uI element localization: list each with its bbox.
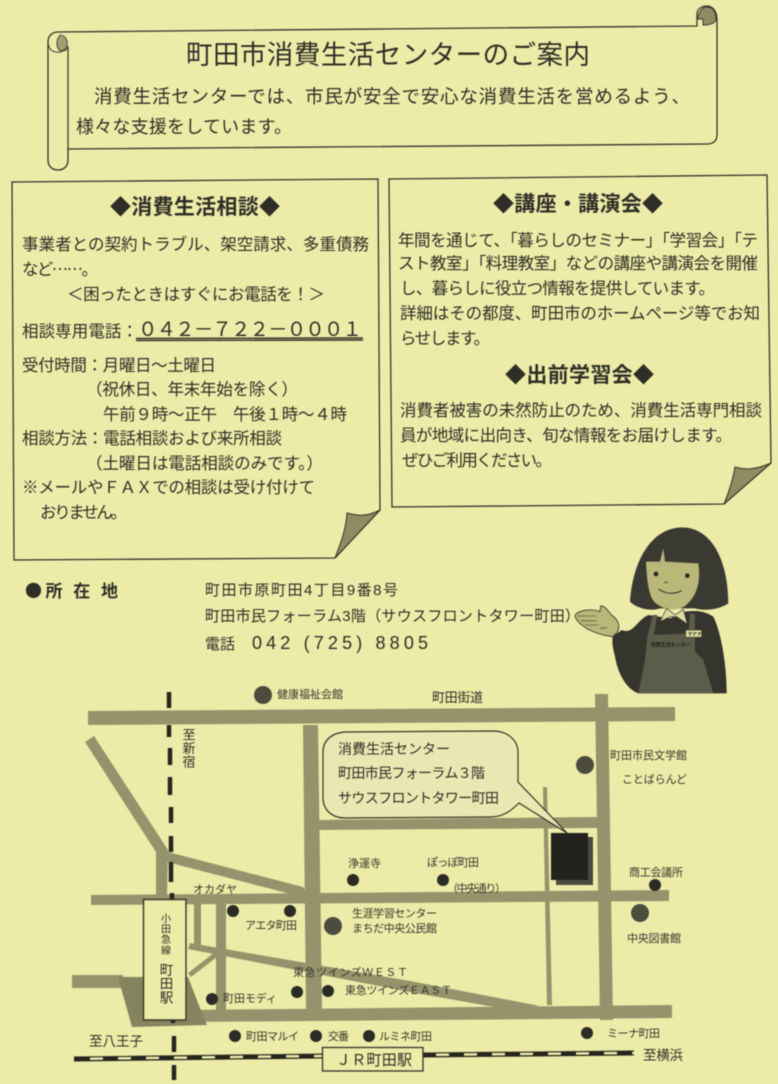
landmark labels: ルミネ町田 xyxy=(379,1030,432,1043)
direction: Hachioji: 至八王子 xyxy=(89,1034,143,1049)
hours and methods: 相談方法：電話相談および来所相談 xyxy=(22,429,282,448)
address block xyxy=(205,582,580,653)
landmark labels: （中央通り） xyxy=(447,882,506,895)
intro text xyxy=(76,86,690,137)
phone number: ０４２－７２２－０００１ xyxy=(138,319,362,341)
consultation body text: など……。 xyxy=(22,256,98,280)
landmark labels: ぽっぽ町田 xyxy=(427,856,479,869)
hours and methods: おりません。 xyxy=(40,503,127,522)
direction: Yokohama: 至横浜 xyxy=(643,1048,684,1063)
heading: ◆講座・講演会◆ xyxy=(493,193,663,216)
outreach body text: 消費者被害の未然防止のため、消費生活専門相談 xyxy=(400,401,762,420)
callout: consumer center: 町田市民フォーラム３階 xyxy=(338,765,485,781)
page curl xyxy=(335,510,380,558)
JR Machida station: ＪＲ町田駅 xyxy=(336,1052,412,1069)
Odakyu Machida station xyxy=(144,900,186,1020)
illustration: staff woman gesturing: マナナ xyxy=(688,632,702,638)
callout: consumer center xyxy=(323,731,567,833)
Odakyu Machida station: 町田駅 xyxy=(158,963,173,1004)
consultation body text: 事業者との契約トラブル、架空請求、多重債務 xyxy=(22,234,370,254)
hours and methods: 受付時間：月曜日～土曜日 xyxy=(22,356,216,375)
illustration: staff woman gesturing xyxy=(575,527,728,693)
direction: Shinjuku: 至新宿 xyxy=(180,728,196,768)
hours and methods xyxy=(22,356,347,522)
consultation body text xyxy=(22,234,370,304)
lectures body text: し、暮らしに役立つ情報を提供しています。 xyxy=(400,279,715,298)
location heading: ●所 在 地 xyxy=(25,577,118,602)
landmark labels xyxy=(193,687,687,1043)
landmark labels: 生涯学習センター xyxy=(352,906,437,920)
landmark labels: 東急ツインズＥＡＳＴ xyxy=(345,983,452,997)
landmark labels: 交番 xyxy=(328,1030,349,1043)
hours and methods: ※メールやＦＡＸでの相談は受け付けて xyxy=(22,478,315,497)
address block: 町田市原町田4丁目9番8号 xyxy=(205,582,398,599)
Odakyu line xyxy=(169,692,174,1080)
phone number xyxy=(22,319,363,341)
landmark labels: 町田市民文学館 xyxy=(610,748,687,762)
landmark labels: 中央図書館 xyxy=(627,931,681,945)
landmark labels: 健康福祉会館 xyxy=(277,687,343,701)
panel: lectures and outreach xyxy=(389,175,771,507)
page curl xyxy=(724,463,771,504)
lectures body text: らせします。 xyxy=(400,330,490,348)
landmark labels: ことばらんど xyxy=(622,773,687,786)
landmark labels: オカダヤ xyxy=(193,882,237,896)
address block: 電話 xyxy=(205,636,235,653)
lectures body text xyxy=(398,231,760,348)
title: 町田市消費生活センターのご案内 xyxy=(186,40,590,70)
map xyxy=(72,686,687,1080)
consultation body text: ＜困ったときはすぐにお電話を！＞ xyxy=(67,285,325,304)
hours and methods: （祝休日、年末年始を除く） xyxy=(86,380,298,399)
outreach body text: 員が地域に出向き、旬な情報をお届けします。 xyxy=(400,426,732,445)
address block: 042 (725) 8805 xyxy=(252,633,428,653)
intro text: 様々な支援をしています。 xyxy=(76,117,292,137)
heading: ◆出前学習会◆ xyxy=(505,364,654,387)
landmark labels: 町田モディ xyxy=(223,991,277,1005)
landmark markers xyxy=(206,686,661,1042)
building: consumer center xyxy=(551,833,593,885)
illustration: staff woman gesturing: 消費生活センター xyxy=(651,642,691,649)
hours and methods: 午前９時～正午 午後１時～４時 xyxy=(103,405,347,424)
landmark labels: 商工会議所 xyxy=(629,865,683,879)
landmark labels: 町田マルイ xyxy=(246,1030,299,1043)
intro text: 消費生活センターでは、市民が安全で安心な消費生活を営めるよう、 xyxy=(94,86,690,107)
lectures body text: 年間を通じて、「暮らしのセミナー」「学習会」「テ xyxy=(398,231,758,250)
landmark labels: 浄運寺 xyxy=(348,856,381,870)
callout: consumer center: 消費生活センター xyxy=(338,741,450,757)
landmark labels: まちだ中央公民館 xyxy=(352,922,437,935)
road name: Machida Kaido: 町田街道 xyxy=(432,690,483,705)
JR line xyxy=(74,1053,634,1059)
lectures body text: スト教室」「料理教室」などの講座や講演会を開催 xyxy=(398,254,758,273)
outreach body text: ぜひご利用ください。 xyxy=(402,451,552,470)
panel: scroll banner xyxy=(48,6,717,170)
landmark labels: ミーナ町田 xyxy=(607,1027,660,1040)
JR Machida station xyxy=(322,1048,423,1071)
phone number: 相談専用電話： xyxy=(22,322,138,341)
address block: 町田市民フォーラム3階（サウスフロントタワー町田） xyxy=(205,608,580,625)
callout: consumer center: サウスフロントタワー町田 xyxy=(338,790,499,806)
Odakyu Machida station: 小田急線 xyxy=(158,913,170,956)
landmark labels: 東急ツインズＷＥＳＴ xyxy=(293,965,408,979)
heading: ◆消費生活相談◆ xyxy=(110,196,280,219)
lectures body text: 詳細はその都度、町田市のホームページ等でお知 xyxy=(400,304,760,323)
hours and methods: （土曜日は電話相談のみです。） xyxy=(86,454,323,473)
outreach body text xyxy=(400,401,762,470)
panel: consumer consultation xyxy=(12,179,380,560)
roads xyxy=(72,694,675,1027)
landmark labels: アエタ町田 xyxy=(245,919,297,932)
